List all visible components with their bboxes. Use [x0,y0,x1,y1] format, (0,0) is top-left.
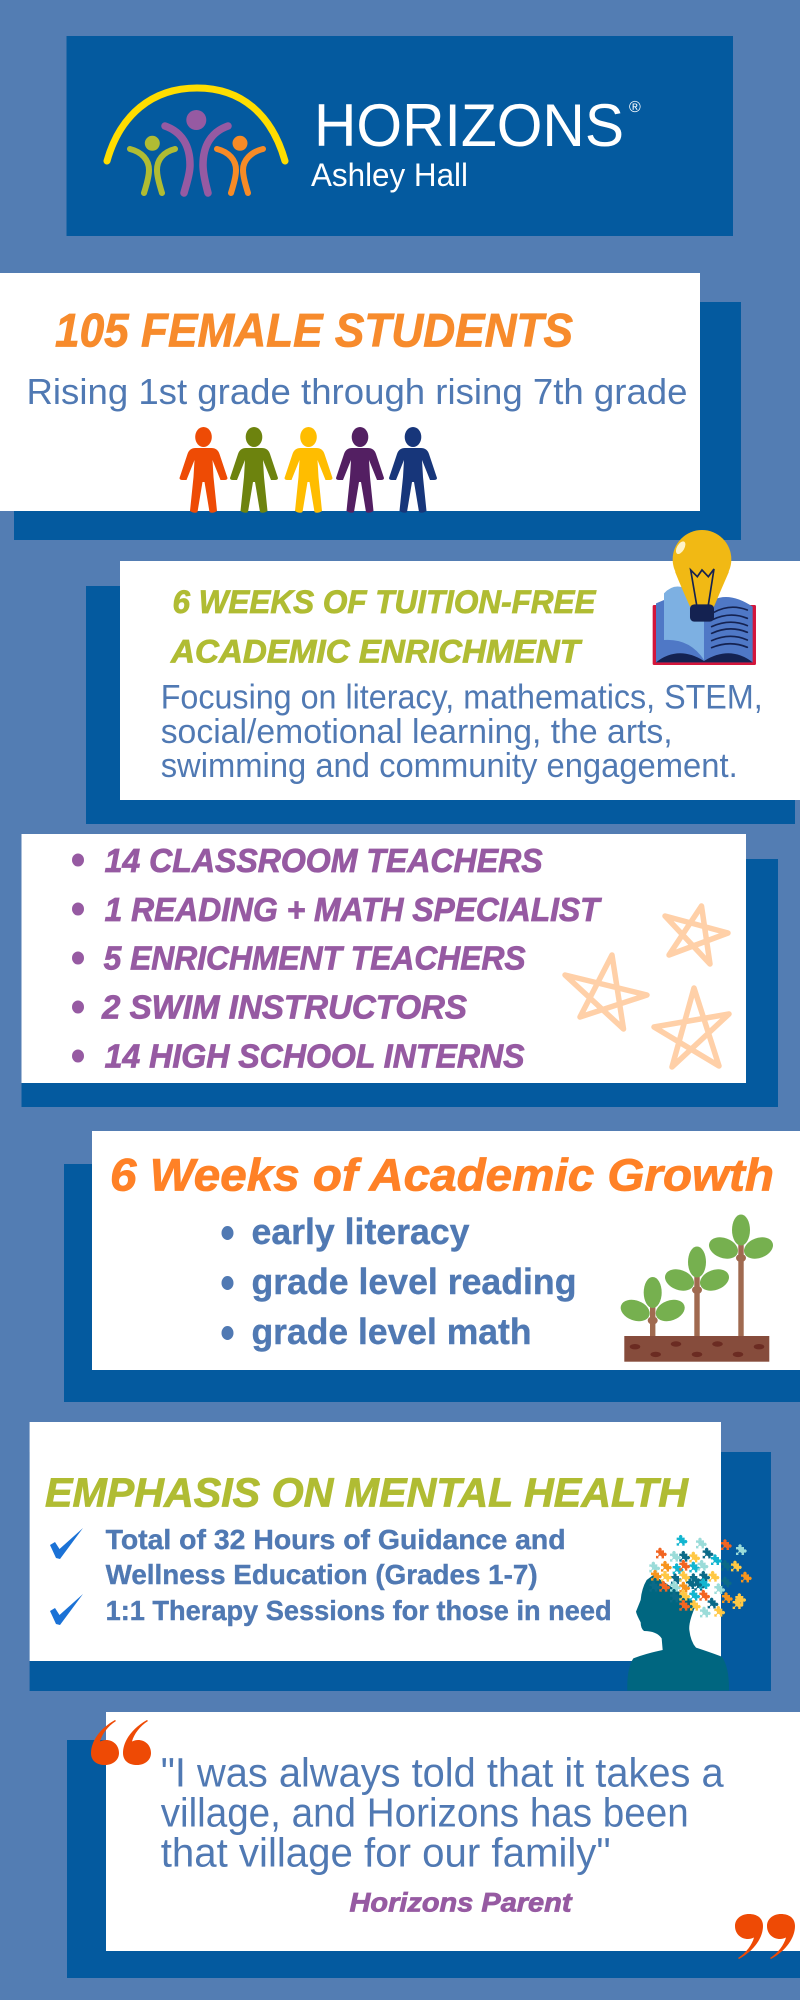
icon: row of five people [180,427,437,513]
heading: 105 female students: 105 FEMALE STUDENTS [55,304,573,356]
parent quote text: "I was always told that it takes a [161,1750,724,1796]
staff bullet list: 1 READING + MATH SPECIALIST [105,891,602,928]
guidance hours text: Wellness Education (Grades 1-7) [106,1559,538,1590]
growth bullet list: grade level math [252,1311,532,1352]
heading: academic enrichment: ACADEMIC ENRICHMENT [170,634,583,670]
panel: parent quote [67,1712,800,1978]
grade range text: Rising 1st grade through rising 7th grade [26,371,688,412]
therapy sessions text: 1:1 Therapy Sessions for those in need [106,1595,612,1626]
growth bullet list: grade level reading [252,1261,576,1302]
guidance hours text [106,1524,566,1590]
panel: staff list [22,834,778,1107]
enrichment description [161,678,763,785]
icon: check mark one [50,1528,83,1559]
staff bullet list: 14 CLASSROOM TEACHERS [105,842,543,879]
quote attribution: Horizons Parent [350,1888,573,1918]
logo wordmark: HORIZONS [314,92,624,159]
icon: growing seedlings [618,1214,776,1410]
icon: head silhouette with puzzle pieces [627,1535,752,1691]
panel: academic enrichment [86,530,800,824]
heading: six weeks of academic growth: 6 Weeks of Academic Growth [110,1150,774,1200]
staff bullet list: 2 SWIM INSTRUCTORS [101,988,467,1026]
parent quote text [161,1750,724,1876]
staff bullet list: 5 ENRICHMENT TEACHERS [104,940,526,976]
heading: emphasis on mental health: EMPHASIS ON MENTAL HEALTH [45,1470,689,1516]
staff bullet list: 14 HIGH SCHOOL INTERNS [105,1038,525,1074]
panel: students [0,273,741,540]
enrichment description: Focusing on literacy, mathematics, STEM, [161,678,763,716]
guidance hours text: Total of 32 Hours of Guidance and [106,1524,566,1555]
panel: mental health [30,1422,771,1691]
panel: academic growth [64,1131,800,1410]
growth bullet list: early literacy [252,1211,470,1252]
icon: hand-drawn stars [565,906,729,1067]
registered mark: ® [629,99,641,116]
enrichment description: swimming and community engagement. [161,747,738,785]
enrichment description: social/emotional learning, the arts, [161,713,673,751]
icon: book and light bulb [653,530,756,665]
parent quote text: that village for our family" [161,1830,611,1876]
icon: check mark two [50,1594,83,1625]
header banner [66,36,733,236]
growth bullet list [222,1211,576,1352]
staff bullet list [72,842,602,1074]
logo subtitle: Ashley Hall [311,157,468,193]
parent quote text: village, and Horizons has been [161,1790,689,1836]
icon: closing quotation mark [735,1914,795,1959]
heading: six weeks tuition-free: 6 WEEKS OF TUITION-FREE [172,584,597,620]
icon: Horizons logo [107,88,285,193]
icon: opening quotation mark [91,1720,151,1765]
